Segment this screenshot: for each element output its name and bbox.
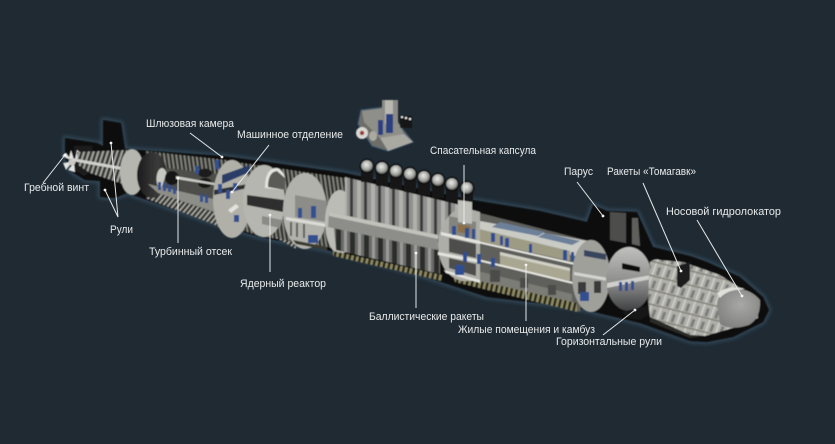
reactor lower ribs xyxy=(272,236,296,249)
keel strip xyxy=(650,317,705,338)
horizontal hydroplane xyxy=(622,303,660,320)
Tomahawk launch tubes xyxy=(677,262,690,288)
reactor compartment disc xyxy=(243,165,285,237)
lower rooms xyxy=(465,268,572,305)
leader: machine room xyxy=(231,145,269,193)
turbine lower ribs xyxy=(145,190,228,232)
leader: sonar xyxy=(697,220,743,297)
cargo boxes xyxy=(458,224,470,234)
missile tubes upper xyxy=(345,177,460,244)
label: turbine compartment: Турбинный отсек xyxy=(149,246,232,258)
label: sail: Парус xyxy=(564,166,593,178)
front of missile bulkhead disc xyxy=(438,207,480,281)
reactor disc xyxy=(283,173,327,249)
leader: airlock xyxy=(190,133,223,158)
label: living quarters and galley: Жилые помещения и камбуз xyxy=(458,324,595,336)
label: bow sonar: Носовой гидролокатор xyxy=(666,206,781,218)
quarters roof xyxy=(475,221,593,256)
leader: rudders xyxy=(104,142,118,217)
leader: hydroplanes xyxy=(603,309,636,335)
command centre sphere xyxy=(606,247,652,311)
icon: propeller xyxy=(62,146,96,176)
label: propeller: Гребной винт xyxy=(24,182,89,194)
crew figures xyxy=(452,226,574,275)
stern bulkhead disc xyxy=(120,149,144,195)
middle storage blocks xyxy=(500,252,570,281)
reactor arch xyxy=(265,168,285,190)
label: airlock: Шлюзовая камера xyxy=(146,118,235,130)
leader: sail xyxy=(577,182,604,217)
label: nuclear reactor: Ядерный реактор xyxy=(240,278,326,290)
leader: capsule xyxy=(463,165,465,224)
leader lines xyxy=(43,133,743,335)
turbine upper ribs xyxy=(145,151,228,190)
missile tubes lower xyxy=(334,228,440,274)
missile deck strip xyxy=(333,251,442,281)
missile compartment xyxy=(325,177,460,281)
deck strip xyxy=(453,275,577,312)
leader: reactor xyxy=(269,214,271,272)
upper storage blocks xyxy=(475,228,570,261)
missile tier band xyxy=(328,212,438,250)
sail equipment xyxy=(610,212,626,243)
label: machine room: Машинное отделение xyxy=(237,129,343,141)
label: rescue capsule: Спасательная капсула xyxy=(430,145,537,157)
label: Tomahawk missiles: Ракеты «Томагавк» xyxy=(607,166,696,178)
label: ballistic missiles: Баллистические ракеты xyxy=(369,311,484,323)
sonar dome xyxy=(717,289,760,328)
label: horizontal rudders: Горизонтальные рули xyxy=(556,336,662,348)
missile hatches xyxy=(360,160,474,204)
forward bulkhead disc xyxy=(572,240,610,312)
turbine cylinder xyxy=(137,152,167,198)
leader: turbine xyxy=(177,177,179,243)
machine room disc xyxy=(213,160,251,238)
leader: ballistic missiles xyxy=(415,252,417,308)
submarine hull xyxy=(62,120,769,342)
icon: rescue capsule detail xyxy=(356,100,413,151)
hull silhouette xyxy=(65,120,769,342)
living quarters interior xyxy=(453,213,593,312)
label: rudders: Рули xyxy=(110,224,133,236)
nose ribs xyxy=(648,259,758,336)
leader: propeller xyxy=(43,154,66,183)
hull glow xyxy=(65,120,769,342)
turbine compartment interior xyxy=(148,160,224,215)
tail cone ribs xyxy=(77,150,128,186)
deck lines xyxy=(478,241,575,284)
propeller shaft xyxy=(72,158,122,170)
rescue capsule shaft xyxy=(458,200,472,224)
leader: living quarters xyxy=(525,264,527,321)
leader: Tomahawk xyxy=(643,183,682,272)
mid hull ribs backing xyxy=(222,160,345,250)
